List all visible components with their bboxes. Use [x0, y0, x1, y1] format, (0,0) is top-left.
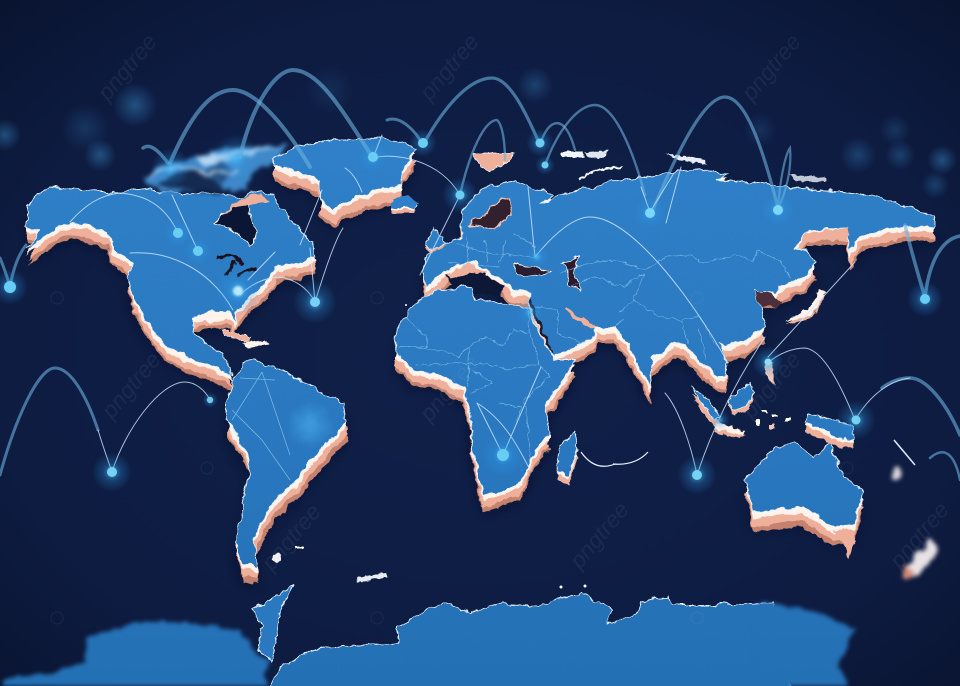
- arcs: thin connection lines: [70, 135, 910, 475]
- map: Africa: [395, 287, 575, 515]
- map: Australia: [746, 442, 863, 558]
- watermarks: pngtree: [255, 499, 326, 576]
- network nodes: [0, 129, 943, 495]
- country border lines: [399, 233, 790, 460]
- arcs: thick flight paths: [0, 70, 960, 480]
- inland seas: [445, 198, 850, 353]
- map: South America: [227, 360, 348, 587]
- map: Canadian Arctic islands: [143, 145, 290, 192]
- map: islands: [223, 150, 854, 583]
- map: small coral arc: [405, 304, 915, 588]
- map: Iceland: [392, 195, 417, 214]
- map: blurred south-east islands: [892, 466, 940, 580]
- map: Greenland: [273, 138, 417, 228]
- thin border lines: South America: [232, 372, 290, 480]
- watermarks: pngtree: [413, 29, 484, 106]
- bokeh light spots: [0, 66, 957, 199]
- watermarks: pngtree: [91, 29, 162, 106]
- watermarks: pngtree: [735, 29, 806, 106]
- watermarks: pngtree: [883, 497, 954, 574]
- watermarks: pngtree: [563, 497, 634, 574]
- watermarks: pngtree: [413, 350, 484, 427]
- watermarks: pngtree: [95, 347, 166, 424]
- map: North America: [27, 187, 315, 395]
- watermarks: pngtree: [735, 347, 806, 424]
- map: Eurasia: [423, 170, 935, 405]
- map: Antarctica: [0, 585, 854, 686]
